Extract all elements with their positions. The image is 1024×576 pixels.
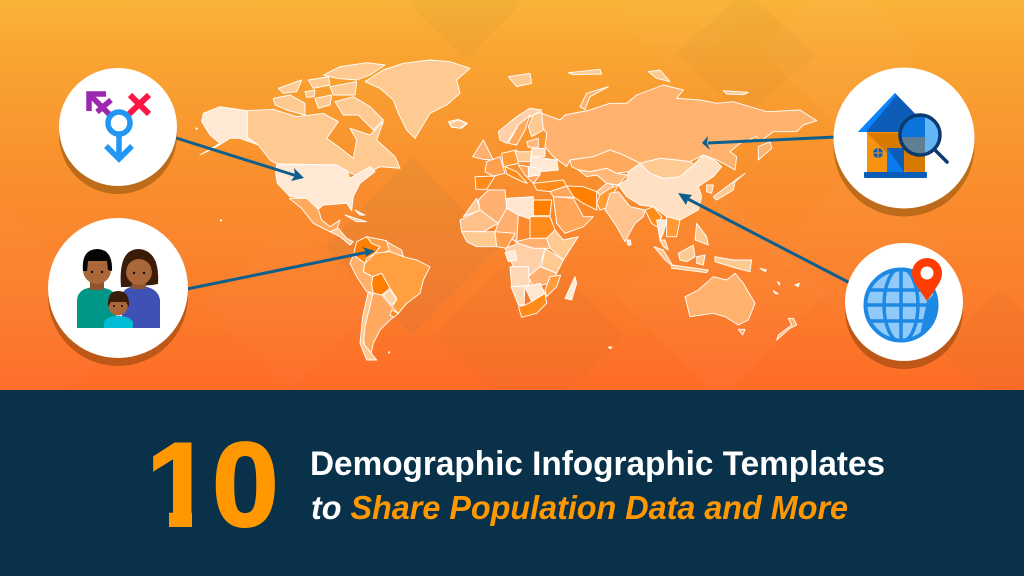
banner panel (0, 390, 1024, 576)
Africa (478, 190, 507, 223)
headline line 2: to Share Population Data and More (311, 489, 848, 526)
Europe (498, 108, 542, 143)
arrow: globe icon to China (678, 193, 850, 283)
icon: family circle (48, 218, 188, 366)
mask: trims the foot of the digit 1 (140, 509, 212, 532)
map: Europe, Africa, Asia, Oceania (450, 69, 817, 349)
arrow: house icon to Russia (702, 136, 836, 150)
icon: globe with pin circle (845, 243, 963, 369)
orange background panel (0, 0, 1024, 390)
world map (196, 60, 817, 360)
icon: house and magnifier circle (834, 68, 974, 216)
big number 10: 10 (146, 418, 279, 552)
arrow: family icon to South America (187, 247, 375, 289)
icon: gender symbols circle (59, 68, 177, 194)
headline line 1: Demographic Infographic Templates (310, 445, 885, 483)
map: Americas (196, 60, 470, 360)
arrow: gender icon to North America (173, 137, 304, 181)
